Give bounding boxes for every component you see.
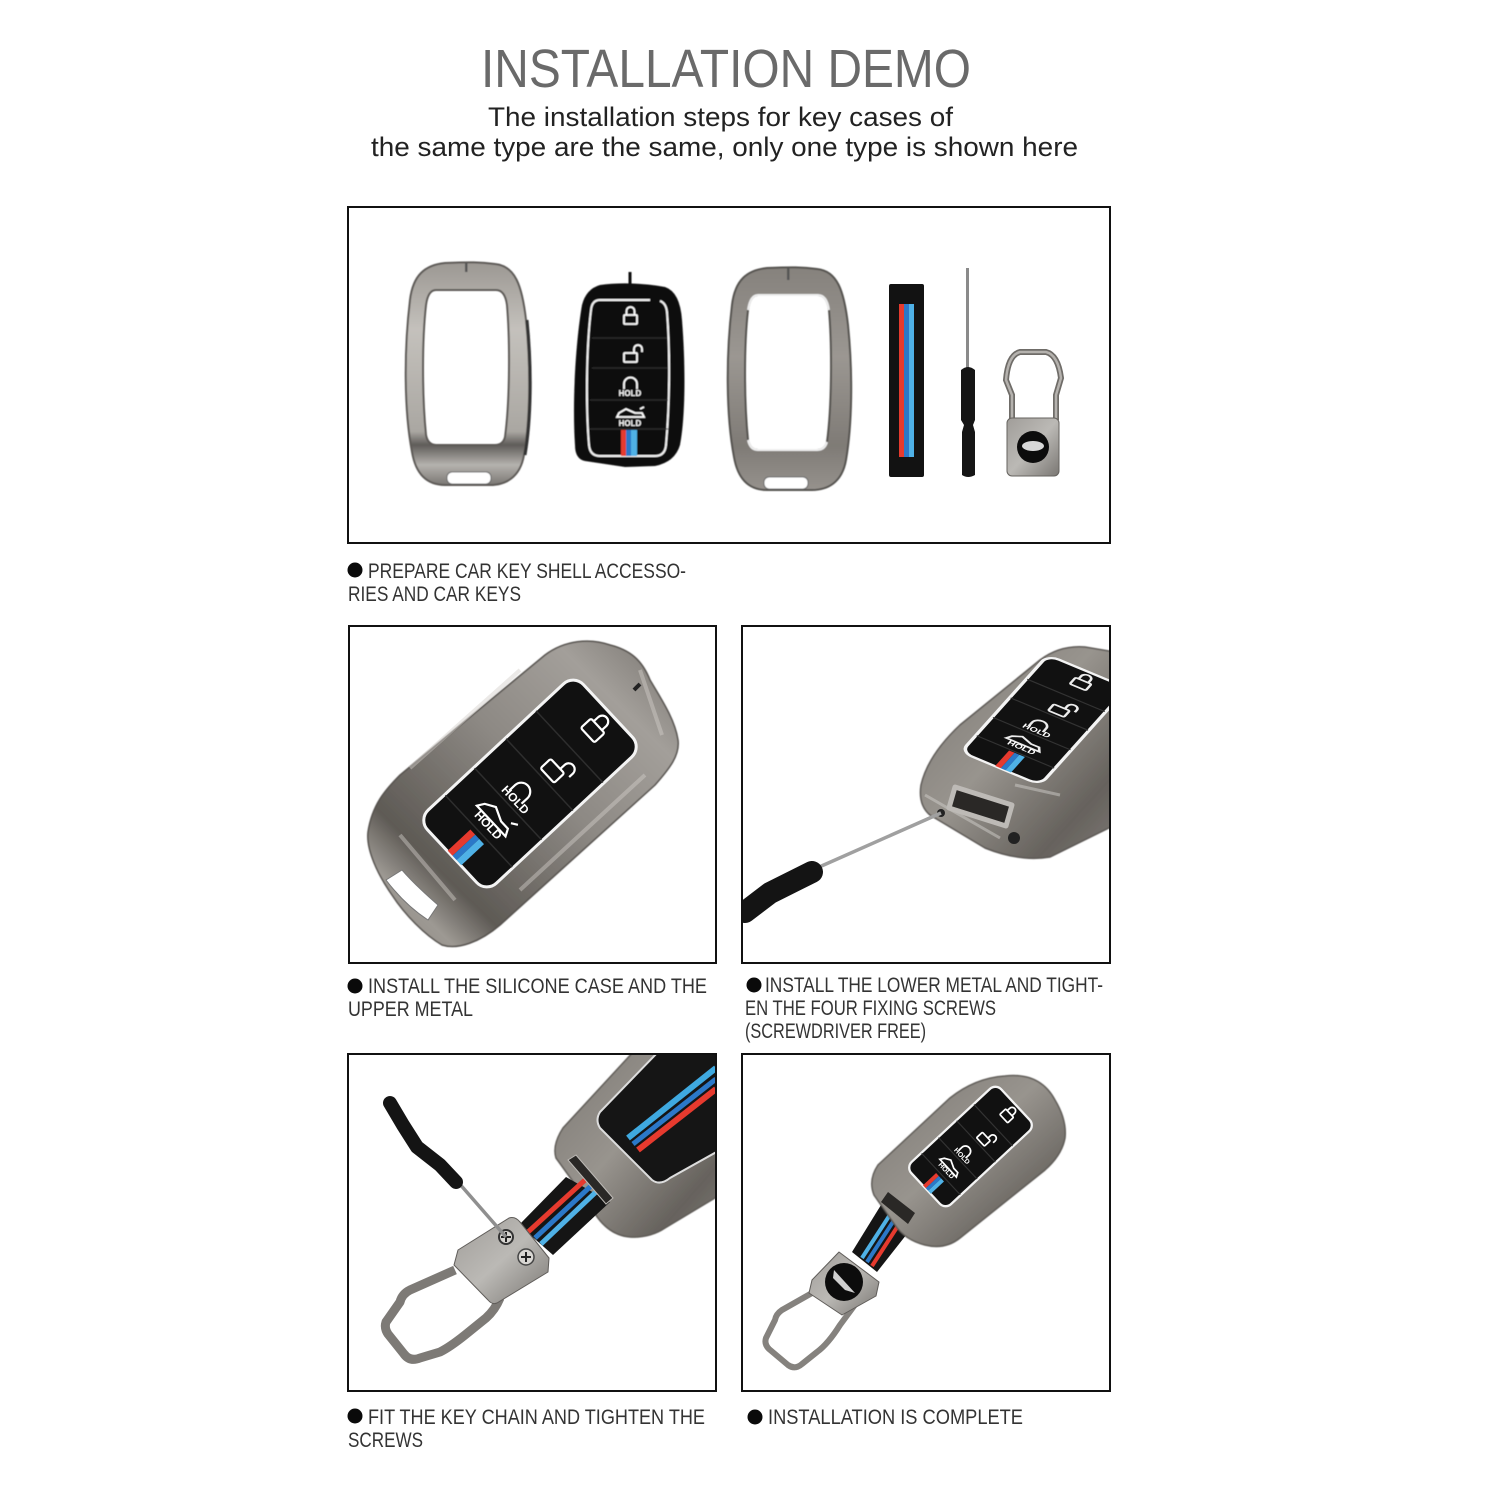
strap: [852, 1205, 914, 1272]
caption: step 1: PREPARE CAR KEY SHELL ACCESSO-: [368, 560, 686, 583]
plate screws: [499, 1230, 534, 1265]
key slot: [568, 1155, 613, 1204]
key chain plate: [454, 1218, 549, 1304]
caption: step 3: EN THE FOUR FIXING SCREWS: [745, 997, 996, 1020]
key shell: [920, 647, 1115, 858]
silicone case: HOLD: [619, 389, 642, 398]
caption: step 3: [745, 974, 1103, 1043]
key chain loop: [385, 1270, 500, 1359]
strap: [519, 1177, 610, 1255]
key slot: [949, 787, 1012, 826]
button panel: HOLD: [937, 1162, 955, 1181]
caption: step 5: INSTALLATION IS COMPLETE: [768, 1406, 1023, 1429]
caption: step 3: INSTALL THE LOWER METAL AND TIGHT-: [765, 974, 1103, 997]
icons on buttons: [477, 700, 619, 836]
caption: step 1: [348, 560, 686, 606]
caption: step 4: SCREWS: [348, 1429, 423, 1452]
keychain clip: [1006, 352, 1061, 476]
button panel: HOLD: [472, 808, 505, 843]
button panel: HOLD: [1005, 739, 1038, 756]
panel: step 2 silicone case and upper metal: [349, 626, 716, 963]
key chain loop: [765, 1293, 857, 1367]
panel: step 1 accessories: [348, 207, 1110, 543]
key highlights: [400, 670, 662, 900]
screw holes: [937, 809, 1020, 844]
button panel: [964, 657, 1109, 783]
silicone case: HOLD: [619, 419, 642, 428]
caption: step 2: UPPER METAL: [348, 998, 473, 1021]
key shell: [872, 1076, 1065, 1246]
screwdriver: [961, 268, 975, 477]
silicone case: [574, 272, 684, 467]
photo contents: [745, 647, 1127, 912]
subtitle: [371, 102, 1078, 162]
button panel: HOLD: [952, 1147, 971, 1166]
key chain plate: [809, 1252, 879, 1315]
panel: step 3 lower metal and screws: [742, 626, 1127, 963]
key slot: [881, 1192, 915, 1224]
button panel: [418, 674, 642, 893]
subtitle: the same type are the same, only one type is shown here: [371, 132, 1078, 162]
caption: step 4: [348, 1406, 705, 1452]
caption: step 4: FIT THE KEY CHAIN AND TIGHTEN THE: [368, 1406, 705, 1429]
caption: step 3: (SCREWDRIVER FREE): [745, 1020, 926, 1043]
key highlights: [925, 785, 1060, 838]
caption: step 2: [348, 975, 707, 1021]
key shell: [555, 1050, 720, 1237]
button panel: [906, 1083, 1035, 1210]
shell pin hole: [634, 684, 640, 690]
panel: step 4 key chain and screws: [348, 1050, 720, 1391]
button panel: HOLD: [1020, 722, 1053, 740]
subtitle: The installation steps for key cases of: [488, 102, 953, 132]
screwdriver: [390, 1103, 506, 1237]
hanging slot: [386, 870, 438, 920]
title: INSTALLATION DEMO: [481, 39, 971, 99]
screwdriver: [745, 813, 941, 912]
panel: step 5 installation complete: [742, 1054, 1110, 1391]
lower metal frame: [728, 267, 851, 490]
upper metal frame: [406, 262, 530, 485]
logo badge: [825, 1263, 863, 1301]
icons: lock buttons: [617, 307, 644, 417]
rubber strap: [889, 284, 924, 477]
button panel: HOLD: [499, 783, 532, 817]
button panel with stripes: [598, 1050, 720, 1183]
caption: step 2: INSTALL THE SILICONE CASE AND THE: [368, 975, 707, 998]
key shell: [368, 641, 678, 946]
caption: step 1: RIES AND CAR KEYS: [348, 583, 521, 606]
